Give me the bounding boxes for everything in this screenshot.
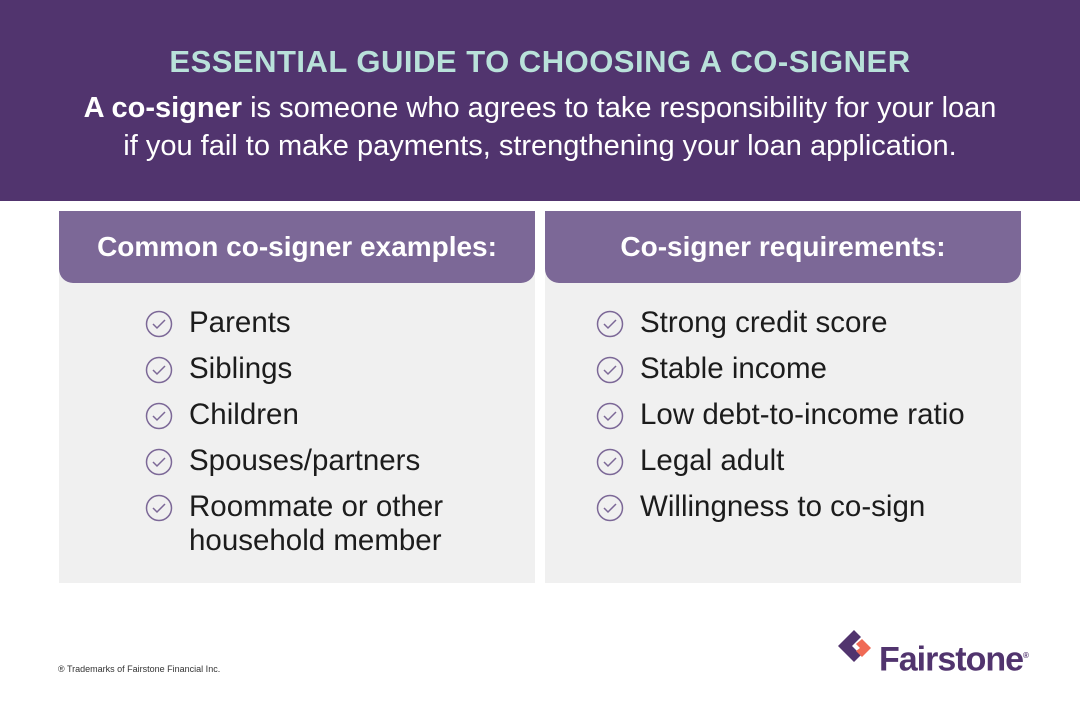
item: adult: Legal adult bbox=[640, 444, 784, 477]
panel heading: examples: Common co-signer examples: bbox=[97, 231, 497, 262]
item: roommate: Roommate or other bbox=[189, 490, 443, 523]
header band bbox=[0, 0, 1080, 201]
panel: examples bbox=[59, 211, 535, 583]
icon: diamond bbox=[838, 630, 871, 662]
item: siblings: Siblings bbox=[189, 352, 292, 385]
item: spouses: Spouses/partners bbox=[189, 444, 420, 477]
item: children: Children bbox=[189, 398, 299, 431]
subtitle: if you fail to make payments, strengthening your loan application. bbox=[123, 130, 957, 162]
wordmark: Fairstone® bbox=[879, 640, 1028, 678]
panel heading: requirements bbox=[545, 211, 1021, 283]
panel heading: requirements: Co-signer requirements: bbox=[620, 231, 946, 262]
item: dti: Low debt-to-income ratio bbox=[640, 398, 965, 431]
item: willingness: Willingness to co-sign bbox=[640, 490, 925, 523]
item: parents: Parents bbox=[189, 306, 291, 339]
subtitle: A co-signer is someone who agrees to take responsibility for your loan bbox=[84, 92, 996, 124]
panel: requirements bbox=[545, 211, 1021, 583]
panel heading: examples bbox=[59, 211, 535, 283]
item: roommate: household member bbox=[189, 524, 442, 557]
title: ESSENTIAL GUIDE TO CHOOSING A CO-SIGNER bbox=[169, 44, 911, 79]
item: income: Stable income bbox=[640, 352, 827, 385]
item: credit: Strong credit score bbox=[640, 306, 888, 339]
subtitle bbox=[84, 92, 996, 162]
item: roommate bbox=[146, 490, 443, 557]
trademark note: ® Trademarks of Fairstone Financial Inc. bbox=[58, 664, 220, 674]
logo bbox=[838, 630, 1029, 678]
